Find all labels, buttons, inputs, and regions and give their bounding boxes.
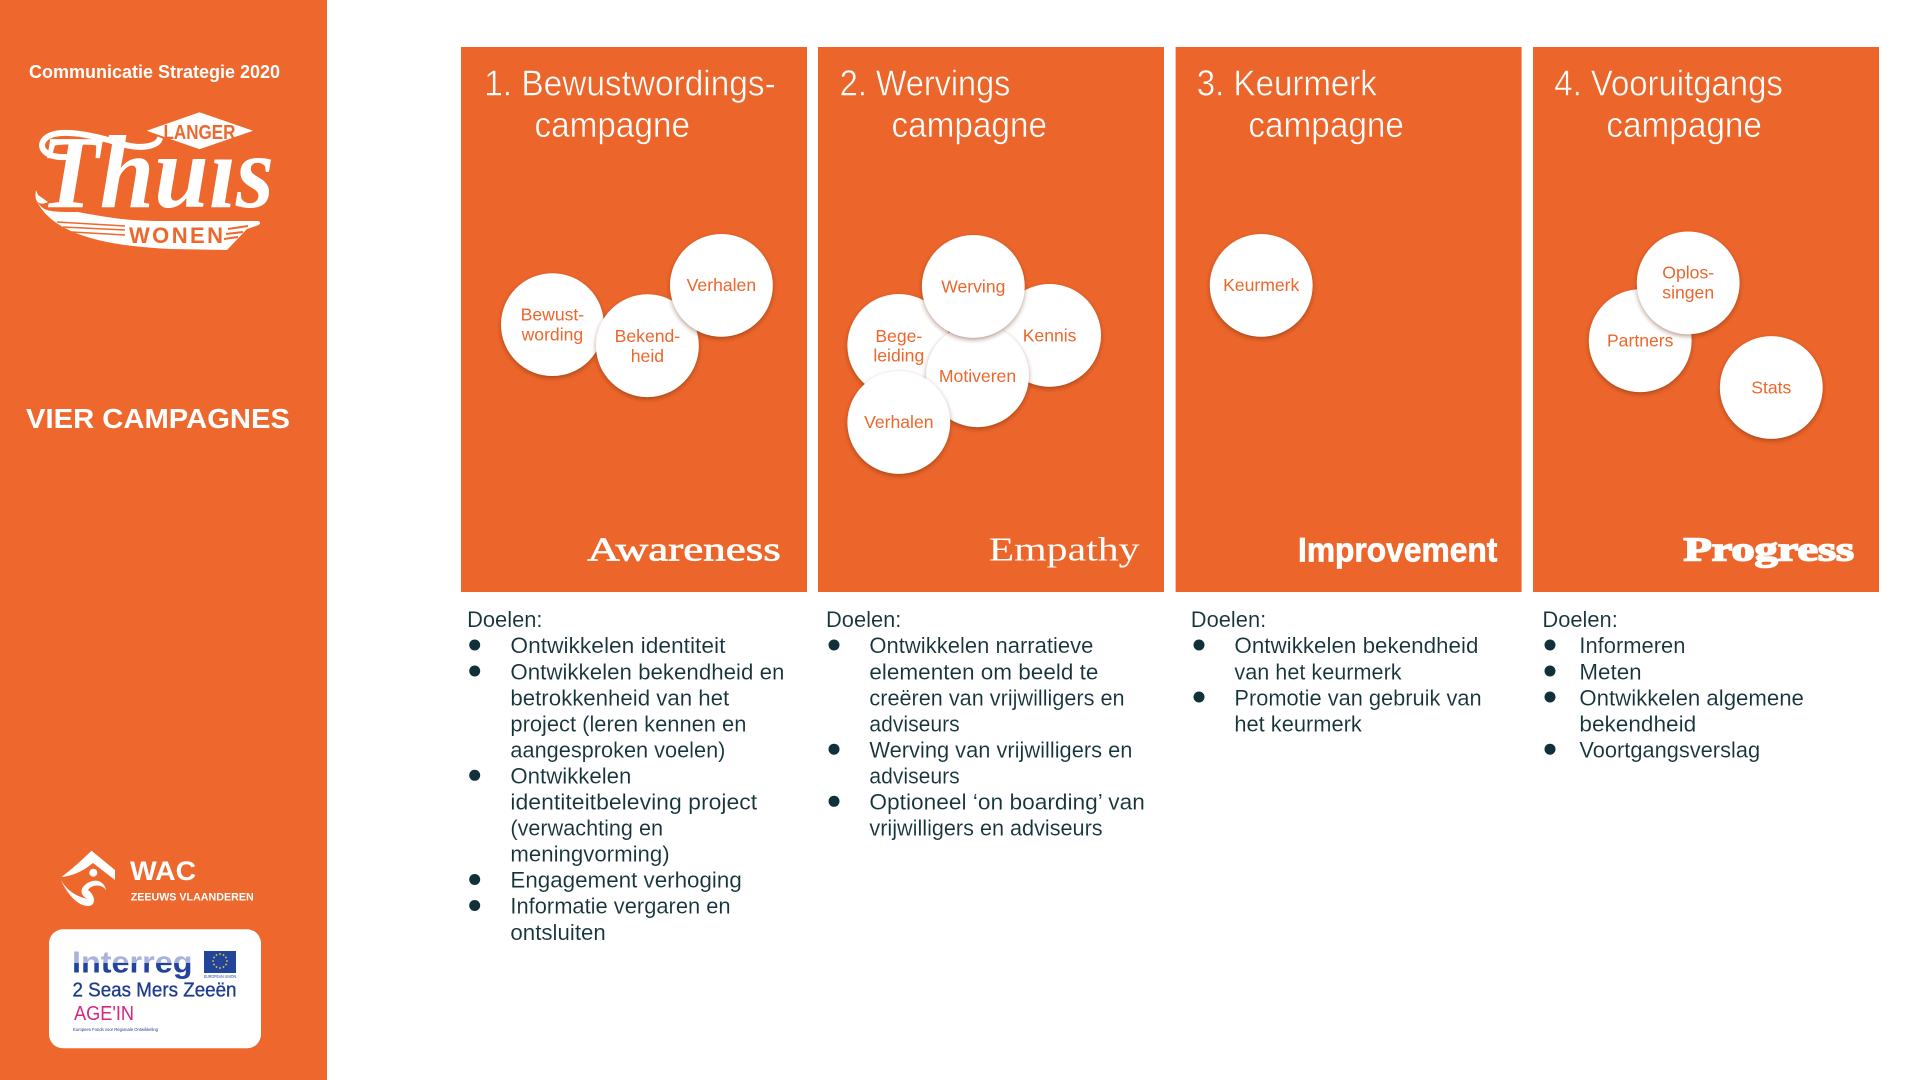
logo: WAC Zeeuws Vlaanderen: WAC: [130, 856, 196, 886]
text block: goals campaign 4: Meten: [1579, 659, 1642, 684]
heading: campaign 1: 1. Bewustwordings-: [484, 63, 776, 104]
text block: goals campaign 2: Optioneel ‘on boarding’ van: [869, 790, 1145, 814]
icon: EU flag: [204, 951, 236, 979]
logo card: Interreg: AGE'IN: [74, 1003, 134, 1025]
bubbles: campaign 1: Bekend-: [615, 326, 680, 346]
text block: goals campaign 1: betrokkenheid van het: [510, 685, 729, 710]
text block: goals campaign 4: [1542, 607, 1804, 762]
bubble: campaign 3: [1210, 234, 1313, 337]
text block: goals campaign 1: Informatie vergaren en: [510, 894, 731, 919]
bubbles: campaign 2: Werving: [941, 276, 1005, 296]
text block: goals campaign 1: aangesproken voelen): [510, 737, 725, 762]
keyword: Progress: Progress: [1684, 532, 1854, 569]
text block: goals campaign 3: [1191, 607, 1482, 736]
text block: goals campaign 1: (verwachting en: [510, 816, 663, 841]
panel: campaign 2: [818, 47, 1164, 592]
text block: goals campaign 4: Doelen:: [1542, 607, 1618, 632]
text block: goals campaign 3: Promotie van gebruik van: [1234, 685, 1482, 710]
heading: campaign 3: [1197, 63, 1404, 145]
heading: campaign 2: [840, 63, 1047, 145]
keyword: Empathy: Empathy: [989, 532, 1140, 569]
heading: campaign 2: 2. Wervings: [840, 63, 1010, 104]
sidebar heading: Communicatie Strategie 2020: [29, 62, 280, 82]
heading: campaign 3: campagne: [1248, 104, 1404, 145]
text block: goals campaign 1: Ontwikkelen identiteit: [510, 633, 725, 658]
logo: WAC Zeeuws Vlaanderen: [61, 851, 254, 906]
icon: EU flag: EUROPEAN UNION: [204, 974, 236, 979]
text block: goals campaign 2: adviseurs: [869, 711, 960, 736]
logo: WAC Zeeuws Vlaanderen: ZEEUWS VLAANDEREN: [131, 892, 254, 904]
text block: goals campaign 1: Ontwikkelen: [510, 764, 631, 788]
text block: goals campaign 2: [826, 607, 1145, 841]
text block: goals campaign 4: Voortgangsverslag: [1579, 737, 1760, 762]
heading: campaign 4: 4. Vooruitgangs: [1554, 63, 1783, 104]
sidebar title: VIER CAMPAGNES: [26, 403, 290, 434]
text block: goals campaign 1: identiteitbeleving project: [510, 790, 757, 814]
panel: sidebar: [0, 0, 327, 1080]
text block: goals campaign 1: meningvorming): [510, 842, 670, 867]
bubbles: campaign 4: singen: [1662, 283, 1714, 303]
text block: goals campaign 3: Ontwikkelen bekendheid: [1234, 633, 1478, 658]
bubbles: campaign 1: Bewust-: [521, 304, 584, 324]
bubbles: campaign 2: Verhalen: [864, 412, 934, 432]
text block: goals campaign 2: Ontwikkelen narratieve: [869, 633, 1093, 658]
text block: goals campaign 1: ontsluiten: [510, 920, 606, 945]
heading: campaign 1: [484, 63, 776, 145]
text block: goals campaign 2: elementen om beeld te: [869, 659, 1098, 684]
bubble: campaign 3: Keurmerk: [1223, 275, 1300, 295]
bubbles: campaign 1: [501, 234, 773, 397]
logo card: Interreg: Interreg: [72, 945, 192, 980]
text block: goals campaign 3: van het keurmerk: [1234, 659, 1403, 684]
bubbles: campaign 2: Bege-: [875, 326, 922, 346]
text block: goals campaign 2: Doelen:: [826, 607, 901, 632]
logo card: Interreg: Europees Fonds voor Regionale Ontwikkeling: [73, 1027, 158, 1032]
keyword: Awareness: Awareness: [587, 532, 781, 569]
panel: campaign 4: [1533, 47, 1879, 592]
logo: Langer Thuis Wonen: LANGER: [164, 122, 236, 144]
panel: campaign 1: [461, 47, 807, 592]
bubbles: campaign 4: [1589, 232, 1823, 439]
bubbles: campaign 4: Stats: [1751, 378, 1792, 398]
bubbles: campaign 1: heid: [631, 346, 664, 366]
heading: campaign 4: campagne: [1606, 104, 1762, 145]
text block: goals campaign 1: project (leren kennen en: [510, 711, 746, 736]
bubbles: campaign 4: Oplos-: [1662, 263, 1714, 283]
logo: Langer Thuis Wonen: WONEN: [129, 223, 223, 248]
keyword: Improvement: Improvement: [1298, 532, 1497, 570]
logo: Langer Thuis Wonen: Thuis: [40, 115, 274, 230]
text block: goals campaign 1: Ontwikkelen bekendheid en: [510, 659, 784, 684]
panel: campaign 3: [1176, 47, 1522, 592]
text block: goals campaign 1: Doelen:: [467, 607, 543, 632]
text block: goals campaign 4: Informeren: [1579, 633, 1685, 658]
heading: campaign 4: [1554, 63, 1783, 145]
bubbles: campaign 2: Kennis: [1023, 325, 1077, 345]
text block: goals campaign 2: adviseurs: [869, 764, 960, 788]
text block: goals campaign 3: het keurmerk: [1234, 711, 1363, 736]
bubbles: campaign 4: Partners: [1607, 330, 1674, 350]
text block: goals campaign 1: [467, 607, 784, 945]
text block: goals campaign 4: bekendheid: [1579, 711, 1696, 736]
text block: goals campaign 1: Engagement verhoging: [510, 868, 742, 893]
bubbles: campaign 2: Motiveren: [939, 366, 1016, 386]
bubbles: campaign 1: wording: [521, 324, 583, 344]
text block: goals campaign 3: Doelen:: [1191, 607, 1266, 632]
logo card: Interreg: [49, 929, 261, 1048]
heading: campaign 2: campagne: [892, 104, 1047, 145]
heading: campaign 1: campagne: [535, 104, 690, 145]
bubbles: campaign 1: Verhalen: [687, 275, 756, 295]
text block: goals campaign 2: creëren van vrijwilligers en: [869, 685, 1125, 710]
bubbles: campaign 2: leiding: [873, 345, 924, 365]
heading: campaign 3: 3. Keurmerk: [1197, 63, 1378, 104]
text block: goals campaign 2: vrijwilligers en adviseurs: [869, 816, 1103, 841]
bubbles: campaign 2: [847, 235, 1101, 474]
logo card: Interreg: 2 Seas Mers Zeeën: [72, 980, 236, 1002]
text block: goals campaign 2: Werving van vrijwilligers en: [869, 737, 1132, 762]
text block: goals campaign 4: Ontwikkelen algemene: [1579, 685, 1804, 710]
